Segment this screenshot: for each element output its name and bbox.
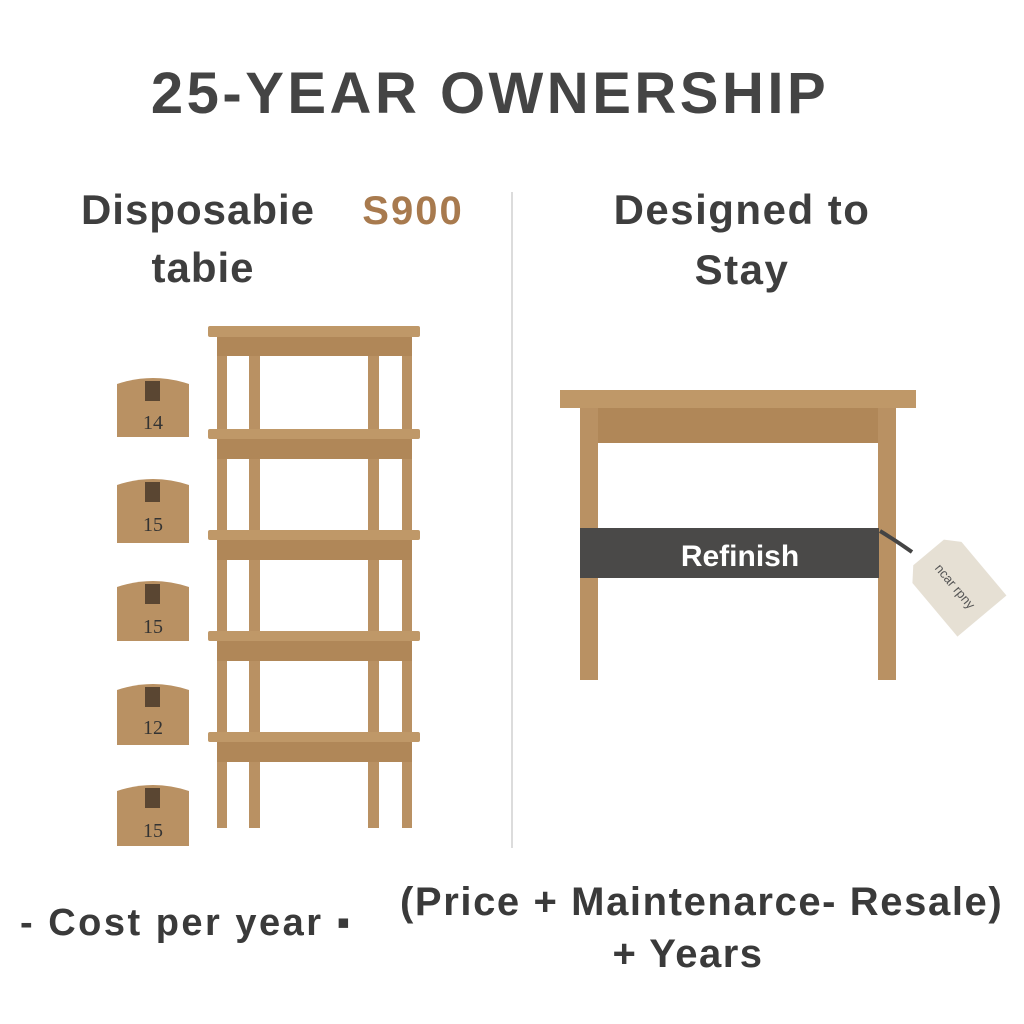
icon: durable table	[560, 390, 1006, 680]
icon: boxes: 15	[143, 820, 163, 842]
formula: - Cost per year ▪	[20, 902, 353, 944]
icon: boxes: 12	[143, 717, 163, 739]
heading: designed to stay: Designed to	[614, 186, 870, 233]
refinish band	[580, 528, 879, 578]
icon: resale tag	[880, 531, 1006, 637]
title: 25-YEAR OWNERSHIP	[151, 61, 829, 126]
heading: designed to stay: Stay	[695, 246, 789, 293]
icon: boxes: 14	[143, 412, 163, 434]
formula: + Years	[612, 932, 764, 976]
price label: S900	[362, 189, 464, 233]
formula: (Price + Maintenarce- Resale)	[400, 880, 1003, 924]
refinish band: Refinish	[681, 540, 799, 573]
icon: stacked tables	[208, 326, 420, 828]
icon: boxes: 15	[143, 616, 163, 638]
heading: disposable table: tabie	[151, 244, 255, 291]
icon: boxes	[117, 378, 189, 846]
icon: resale tag: ncar rpny	[932, 561, 979, 612]
heading: disposable table	[81, 186, 315, 291]
icon: boxes: 15	[143, 514, 163, 536]
heading: disposable table: Disposabie	[81, 186, 315, 233]
formula	[20, 880, 1003, 976]
heading: designed to stay	[614, 186, 870, 293]
